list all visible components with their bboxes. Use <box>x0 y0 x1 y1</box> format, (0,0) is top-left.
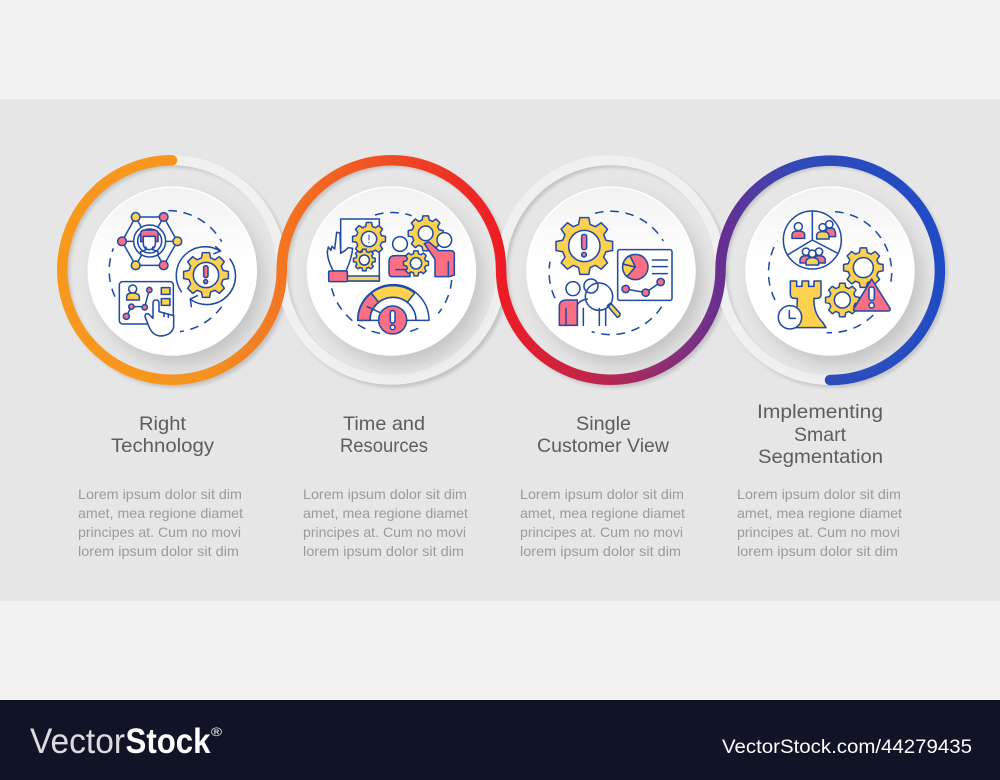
footer logo <box>30 722 222 761</box>
disc shadows <box>96 197 922 365</box>
title: Implementing Smart Segmentation <box>757 401 883 468</box>
body text: column 4: Lorem ipsum dolor sit dim <box>737 486 901 502</box>
body text: column 2: principes at. Cum no movi <box>303 524 466 540</box>
body text: column 2: lorem ipsum dolor sit dim <box>303 543 464 559</box>
title: Time and Resources: Time and <box>343 413 425 435</box>
body text: column 4: lorem ipsum dolor sit dim <box>737 543 898 559</box>
body text: column 1: Lorem ipsum dolor sit dim <box>78 486 242 502</box>
top band <box>0 0 1000 99</box>
footer image id: VectorStock.com/44279435 <box>722 737 972 758</box>
main panel background <box>0 99 1000 601</box>
footer logo: ® <box>211 725 222 739</box>
body text: column 4: principes at. Cum no movi <box>737 524 900 540</box>
footer bar <box>0 700 1000 780</box>
body text: column 2 <box>303 486 468 559</box>
title: Single Customer View <box>537 413 670 457</box>
body text: column 3 <box>520 486 685 559</box>
body text: column 1: principes at. Cum no movi <box>78 524 241 540</box>
title: Implementing Smart Segmentation: Segmentation <box>758 446 883 468</box>
title: Right Technology: Technology <box>111 435 214 457</box>
white discs <box>88 187 914 355</box>
title: Single Customer View: Customer View <box>537 435 670 457</box>
title: Single Customer View: Single <box>576 413 631 435</box>
title: Implementing Smart Segmentation: Smart <box>794 424 847 446</box>
bottom band <box>0 601 1000 700</box>
body text: column 1: amet, mea regione diamet <box>78 505 243 521</box>
body text: column 3: principes at. Cum no movi <box>520 524 683 540</box>
light track segments <box>172 160 830 380</box>
title: Time and Resources <box>340 413 428 457</box>
icon: time and resources <box>327 213 454 334</box>
title: Implementing Smart Segmentation: Implementing <box>757 401 883 423</box>
colored gradient ribbon <box>62 160 940 380</box>
body text: column 2: amet, mea regione diamet <box>303 505 468 521</box>
body text: column 3: lorem ipsum dolor sit dim <box>520 543 681 559</box>
ring shadows <box>65 163 943 383</box>
body text: column 1 <box>78 486 243 559</box>
icon: single customer view <box>549 211 672 335</box>
body text: column 3: amet, mea regione diamet <box>520 505 685 521</box>
footer logo: Stock <box>126 722 211 761</box>
title: Right Technology: Right <box>139 413 187 435</box>
body text: column 4: amet, mea regione diamet <box>737 505 902 521</box>
footer logo: Vector <box>30 722 125 761</box>
body text: column 4 <box>737 486 902 559</box>
title: Right Technology <box>111 413 214 457</box>
body text: column 2: Lorem ipsum dolor sit dim <box>303 486 467 502</box>
title: Time and Resources: Resources <box>340 435 428 457</box>
body text: column 3: Lorem ipsum dolor sit dim <box>520 486 684 502</box>
body text: column 1: lorem ipsum dolor sit dim <box>78 543 239 559</box>
icon: right technology <box>109 211 235 336</box>
icon: implementing smart segmentation <box>769 211 892 333</box>
